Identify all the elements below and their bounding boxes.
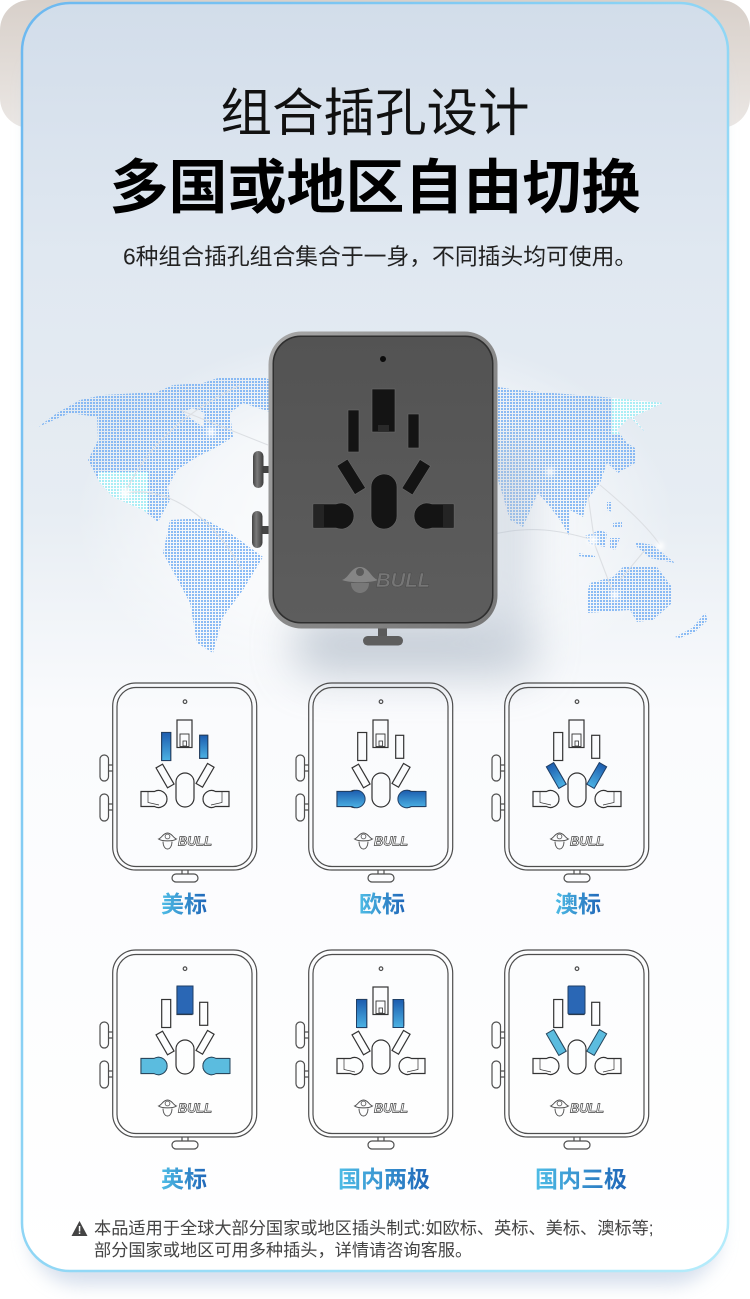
map backdrop glow	[75, 330, 675, 710]
label: UK: 英标	[161, 1166, 207, 1192]
label: China two-pin: 国内两极	[338, 1166, 430, 1192]
brand logo: BULL	[376, 570, 430, 592]
universal socket product	[252, 332, 498, 646]
footnote line 2: 部分国家或地区可用多种插头，详情请咨询客服。	[94, 1240, 472, 1260]
icon: China three-pin	[492, 950, 649, 1149]
icon: China three-pin: BULL	[570, 1100, 604, 1116]
socket holes	[313, 389, 454, 529]
icon: warning triangle	[72, 1221, 88, 1236]
icon: EU standard	[296, 683, 453, 882]
icon: AU standard: BULL	[570, 834, 604, 848]
top corner background	[0, 0, 750, 128]
icon: US standard	[100, 683, 257, 882]
brand logo	[342, 567, 430, 593]
icon: China two-pin: BULL	[374, 1100, 408, 1116]
icon: EU standard: BULL	[374, 834, 408, 848]
world map	[30, 370, 720, 660]
icon: US standard: BULL	[178, 834, 212, 848]
side knob upper	[253, 451, 270, 488]
icon: AU standard	[492, 683, 649, 882]
label: AU: 澳标	[555, 891, 601, 917]
bottom knob	[363, 627, 403, 646]
footnote	[72, 1218, 654, 1260]
title: 组合插孔设计	[220, 84, 530, 142]
footnote line 1: 本品适用于全球大部分国家或地区插头制式:如欧标、英标、美标、澳标等;	[94, 1218, 654, 1238]
icon: UK standard: BULL	[178, 1100, 212, 1116]
label: China three-pin: 国内三极	[535, 1166, 627, 1192]
icon: UK standard	[100, 950, 257, 1149]
description: 6种组合插孔组合集合于一身，不同插头均可使用。	[123, 244, 637, 270]
socket body	[268, 332, 498, 628]
side knob lower	[252, 511, 270, 548]
indicator dot	[380, 356, 386, 362]
subtitle heading: 多国或地区自由切换	[109, 155, 641, 221]
label: EU: 欧标	[359, 891, 405, 917]
socket shadow	[295, 440, 535, 675]
label: US: 美标	[161, 891, 207, 917]
icon: China two-pin	[296, 950, 453, 1149]
